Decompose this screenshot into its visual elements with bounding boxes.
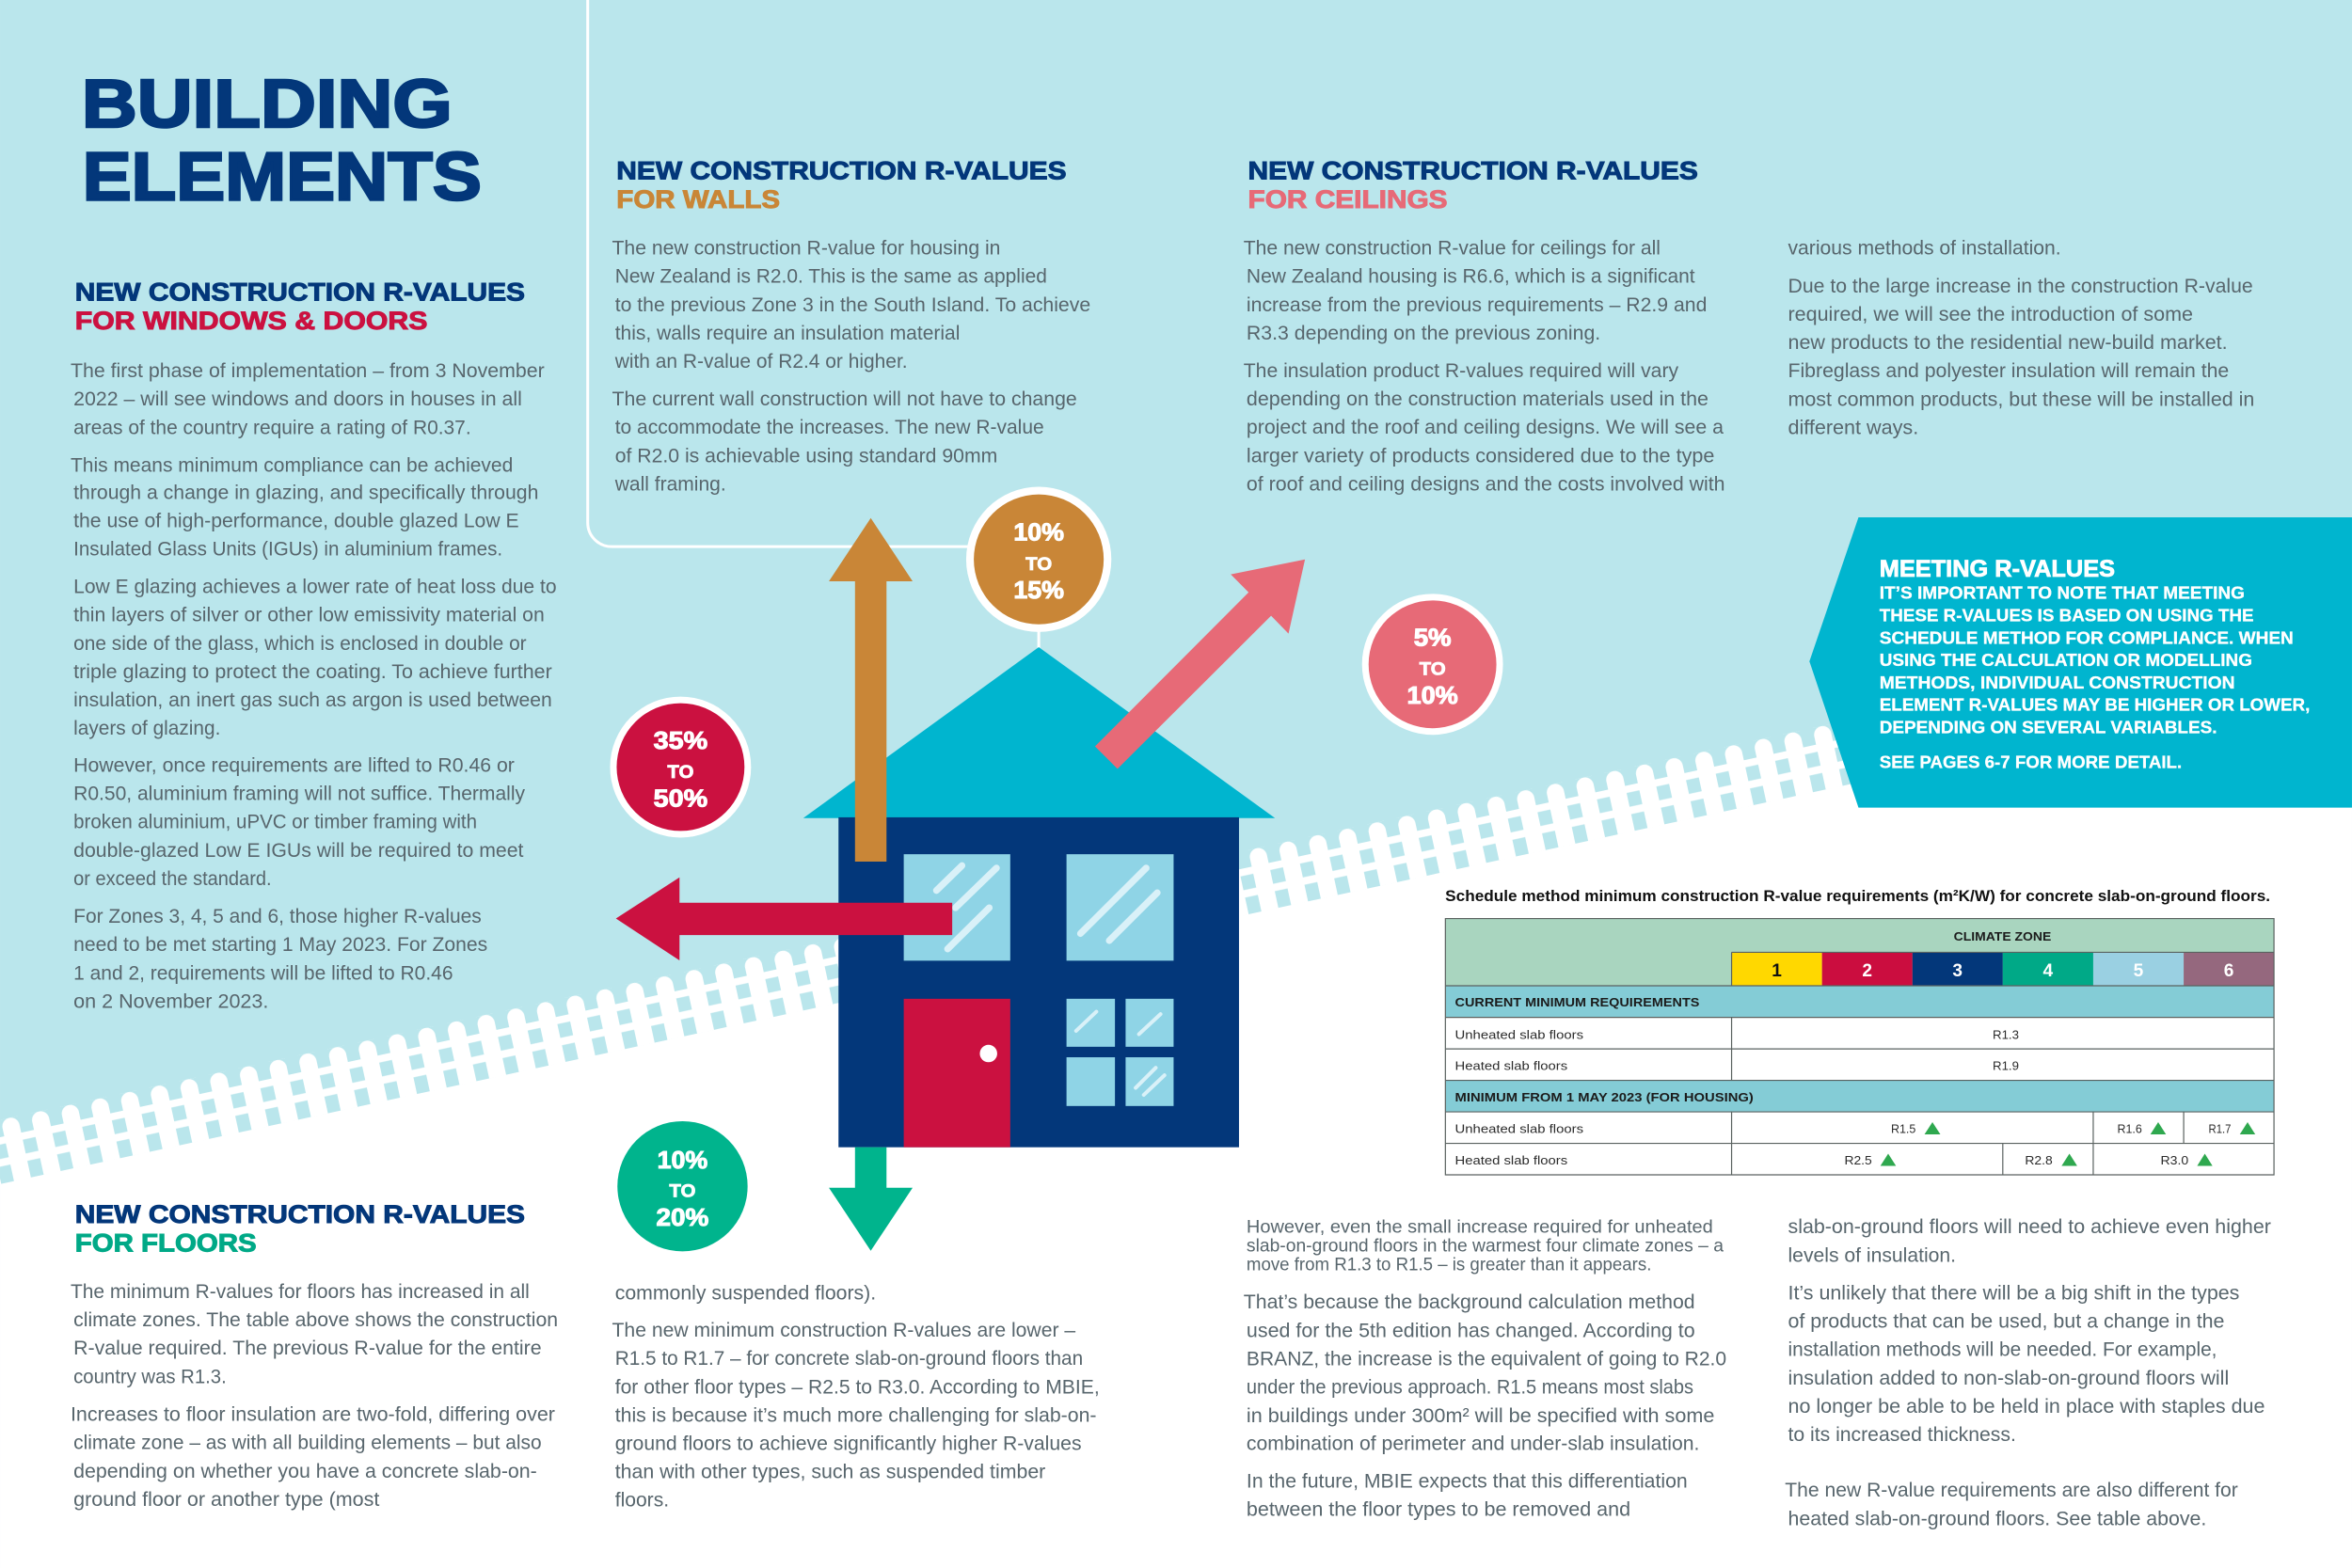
window: small four pane <box>1067 999 1173 1106</box>
badge: windows 35% to 50%: TO <box>667 762 693 783</box>
heading: windows and doors: NEW CONSTRUCTION R-VALUES <box>75 278 525 307</box>
body text: ceilings column one: increase from the previous requirements – R2.9 and <box>1247 294 1707 316</box>
section band: minimum from 1 May 2023 <box>1445 1081 2274 1112</box>
heading: ceilings <box>1248 157 1698 214</box>
callout: meeting R-values: IT’S IMPORTANT TO NOTE THAT MEETING <box>1880 584 2245 603</box>
table rows: new values: Unheated slab floors <box>1455 1122 1583 1136</box>
section band: current minimum requirements <box>1445 986 2274 1018</box>
body text: windows and doors: This means minimum compliance can be achieved <box>71 454 513 476</box>
body text: floors column one: Increases to floor insulation are two-fold, differing over <box>71 1403 555 1425</box>
badge: windows 35% to 50%: 50% <box>654 784 707 812</box>
body text: floors column three: BRANZ, the increase is the equivalent of going to R2.0 <box>1247 1349 1726 1370</box>
house body <box>838 817 1239 1148</box>
badge: floors 10% to 20%: 10% <box>658 1146 707 1174</box>
table rows: new values: R1.7 <box>2209 1122 2231 1136</box>
body text: floors column one: The minimum R-values for floors has increased in all <box>71 1281 530 1303</box>
arrow: floor heat loss <box>829 1148 913 1251</box>
body text: ceilings column two: most common products, but these will be installed in <box>1788 388 2254 410</box>
body text: floors column two: ground floors to achieve significantly higher R-values <box>615 1433 1082 1455</box>
body text: walls: this, walls require an insulation material <box>615 323 960 344</box>
heading: windows and doors: FOR WINDOWS & DOORS <box>75 307 427 335</box>
body text: windows and doors: thin layers of silver or other low emissivity material on <box>73 605 545 626</box>
heading: walls: FOR WALLS <box>616 185 780 214</box>
body text: walls: The current wall construction will not have to change <box>612 388 1077 410</box>
body text: walls: with an R-value of R2.4 or higher. <box>614 351 908 372</box>
title <box>82 66 482 215</box>
table rows: new values: R3.0 <box>2161 1153 2188 1167</box>
body text: floors column one <box>71 1281 558 1511</box>
body text: floors column four: to its increased thickness. <box>1788 1424 2016 1446</box>
badge: ceilings 5% to 10%: 10% <box>1407 681 1458 709</box>
badge: ceilings 5% to 10% <box>1362 594 1503 735</box>
body text: ceilings column two: Fibreglass and polyester insulation will remain the <box>1788 360 2229 382</box>
heading: ceilings: FOR CEILINGS <box>1248 185 1448 214</box>
body text: floors column three: slab-on-ground floors in the warmest four climate zones – a <box>1247 1236 1724 1257</box>
body text: floors column four: of products that can be used, but a change in the <box>1788 1310 2224 1332</box>
body text: windows and doors: 1 and 2, requirements will be lifted to R0.46 <box>73 962 453 984</box>
body text: floors column two: The new minimum construction R-values are lower – <box>612 1320 1075 1341</box>
body text: floors column three: used for the 5th edition has changed. According to <box>1247 1320 1695 1341</box>
body text: walls: to the previous Zone 3 in the South Island. To achieve <box>615 294 1090 316</box>
body text: floors column three: move from R1.3 to R1.5 – is greater than it appears. <box>1247 1255 1651 1275</box>
body text: windows and doors: one side of the glass, which is enclosed in double or <box>73 633 527 655</box>
window: upper right <box>1067 854 1173 960</box>
body text: windows and doors: R0.50, aluminium framing will not suffice. Thermally <box>73 784 526 805</box>
climate zone colour swatches: 1 <box>1772 961 1782 981</box>
badge: floors 10% to 20%: 20% <box>657 1203 708 1231</box>
badge: floors 10% to 20%: TO <box>669 1180 695 1201</box>
heading: walls <box>616 157 1067 214</box>
body text: ceilings column two <box>1788 238 2254 438</box>
body text: ceilings column one: depending on the construction materials used in the <box>1247 388 1708 410</box>
table: schedule method R-value requirements <box>1445 887 2274 1175</box>
body text: windows and doors: Low E glazing achieves a lower rate of heat loss due to <box>73 576 557 597</box>
table rows: new values: R1.5 <box>1891 1122 1915 1136</box>
body text: windows and doors: The first phase of implementation – from 3 November <box>71 360 545 382</box>
body text: floors column three: combination of perimeter and under-slab insulation. <box>1247 1433 1699 1455</box>
section band: current minimum requirements: CURRENT MINIMUM REQUIREMENTS <box>1455 995 1699 1009</box>
body text: floors column four: levels of insulation. <box>1788 1244 1956 1266</box>
body text: floors column one: depending on whether you have a concrete slab-on- <box>73 1461 537 1482</box>
body text: floors column three: However, even the small increase required for unheated <box>1247 1217 1713 1238</box>
badge: walls 10% to 15%: TO <box>1025 554 1052 575</box>
body text: floors column two: than with other types, such as suspended timber <box>615 1462 1045 1483</box>
body text: floors column four: heated slab-on-ground floors. See table above. <box>1788 1508 2206 1529</box>
body text: ceilings column one: project and the roof and ceiling designs. We will see a <box>1247 417 1724 438</box>
body text: ceilings column one: The new construction R-value for ceilings for all <box>1244 238 1661 260</box>
climate zone colour swatches: 6 <box>2224 961 2233 981</box>
body text: floors column three: under the previous approach. R1.5 means most slabs <box>1247 1377 1693 1399</box>
body text: floors column two <box>612 1282 1100 1512</box>
body text: floors column three: between the floor types to be removed and <box>1247 1499 1630 1521</box>
picket fence <box>0 724 1846 1184</box>
badge: walls 10% to 15%: 15% <box>1013 576 1064 604</box>
table rows: new values: R2.8 <box>2025 1153 2053 1167</box>
body text: floors column two: for other floor types – R2.5 to R3.0. According to MBIE, <box>615 1376 1100 1398</box>
body text: floors column four <box>1785 1216 2271 1529</box>
body text: walls: New Zealand is R2.0. This is the same as applied <box>615 266 1047 288</box>
body text: floors column three: In the future, MBIE expects that this differentiation <box>1247 1471 1688 1493</box>
heading: floors <box>75 1200 525 1257</box>
body text: ceilings column one: R3.3 depending on the previous zoning. <box>1247 323 1600 344</box>
badge: ceilings 5% to 10%: TO <box>1420 658 1446 679</box>
house roof <box>803 647 1275 818</box>
table rows: new values: R1.6 <box>2117 1122 2142 1136</box>
table rows: current values: Heated slab floors <box>1455 1059 1568 1073</box>
callout: meeting R-values: ELEMENT R-VALUES MAY BE HIGHER OR LOWER, <box>1880 696 2310 715</box>
white connector line around walls panel <box>588 0 1039 648</box>
body text: windows and doors: areas of the country require a rating of R0.37. <box>73 417 471 438</box>
body text: floors column four: slab-on-ground floors will need to achieve even higher <box>1788 1216 2271 1238</box>
table grid lines <box>1445 919 2274 1175</box>
body text: windows and doors: layers of glazing. <box>73 718 220 739</box>
body text: ceilings column one: The insulation product R-values required will vary <box>1244 360 1679 382</box>
callout: meeting R-values: DEPENDING ON SEVERAL VARIABLES. <box>1880 718 2217 736</box>
climate zone colour swatches: 2 <box>1862 961 1872 981</box>
table rows: current values: Unheated slab floors <box>1455 1027 1583 1041</box>
body text: floors column three: in buildings under 300m² will be specified with some <box>1247 1405 1714 1427</box>
body text: windows and doors: For Zones 3, 4, 5 and 6, those higher R-values <box>73 906 482 927</box>
body text: floors column two: this is because it’s much more challenging for slab-on- <box>615 1404 1096 1426</box>
badge: walls 10% to 15% <box>966 487 1111 632</box>
body text: floors column one: R-value required. The previous R-value for the entire <box>73 1338 542 1359</box>
badge: windows 35% to 50%: 35% <box>654 726 707 754</box>
body text: ceilings column one: New Zealand housing is R6.6, which is a significant <box>1247 266 1695 288</box>
body text: windows and doors: triple glazing to protect the coating. To achieve further <box>73 661 552 683</box>
body text: floors column one: climate zone – as with all building elements – but also <box>73 1432 542 1453</box>
body text: ceilings column one <box>1244 238 1725 495</box>
heading: floors: NEW CONSTRUCTION R-VALUES <box>75 1200 525 1228</box>
callout: meeting R-values: MEETING R-VALUES <box>1880 557 2115 582</box>
body text: ceilings column two: required, we will see the introduction of some <box>1788 304 2193 325</box>
body text: floors column two: R1.5 to R1.7 – for concrete slab-on-ground floors than <box>615 1348 1083 1370</box>
table header: CLIMATE ZONE <box>1954 929 2051 943</box>
climate zone colour swatches <box>1732 952 2274 986</box>
body text: windows and doors: broken aluminium, uPVC or timber framing with <box>73 812 477 833</box>
body text: ceilings column two: different ways. <box>1788 417 1918 438</box>
climate zone colour swatches: 3 <box>1952 961 1963 981</box>
body text: floors column four: The new R-value requirements are also different for <box>1785 1480 2238 1501</box>
white ground <box>0 675 2352 1568</box>
heading: walls: NEW CONSTRUCTION R-VALUES <box>616 157 1067 185</box>
table rows: current values <box>1445 1018 2274 1081</box>
body text: windows and doors: through a change in glazing, and specifically through <box>73 482 538 503</box>
body text: floors column two: commonly suspended floors). <box>615 1282 876 1304</box>
body text: ceilings column one: of roof and ceiling designs and the costs involved with <box>1247 473 1725 495</box>
body text: walls <box>612 238 1090 495</box>
body text: windows and doors: Insulated Glass Units (IGUs) in aluminium frames. <box>73 539 502 561</box>
body text: windows and doors: 2022 – will see windows and doors in houses in all <box>73 388 522 410</box>
callout: meeting R-values: SCHEDULE METHOD FOR COMPLIANCE. WHEN <box>1880 628 2294 647</box>
heading: windows and doors <box>75 278 525 335</box>
arrow: windows heat loss <box>616 878 952 960</box>
body text: ceilings column two: new products to the residential new-build market. <box>1788 332 2228 354</box>
body text: walls: The new construction R-value for housing in <box>612 238 1000 260</box>
climate zone colour swatches: 5 <box>2134 961 2144 981</box>
climate zone colour swatches: 4 <box>2042 961 2053 981</box>
body text: windows and doors <box>71 360 557 1012</box>
body text: walls: wall framing. <box>614 473 726 495</box>
body text: floors column three <box>1244 1217 1726 1521</box>
table rows: current values: R1.3 <box>1993 1027 2019 1041</box>
badge: windows 35% to 50% <box>610 697 751 837</box>
callout: meeting R-values: USING THE CALCULATION OR MODELLING <box>1880 651 2252 670</box>
body text: ceilings column one: larger variety of products considered due to the type <box>1247 445 1714 467</box>
table header <box>1445 919 2274 986</box>
callout: meeting R-values: METHODS, INDIVIDUAL CONSTRUCTION <box>1880 673 2235 692</box>
body text: windows and doors: on 2 November 2023. <box>73 990 268 1012</box>
body text: windows and doors: insulation, an inert gas such as argon is used between <box>73 689 552 711</box>
title: BUILDING <box>82 66 453 142</box>
body text: floors column one: country was R1.3. <box>73 1366 227 1387</box>
heading: ceilings: NEW CONSTRUCTION R-VALUES <box>1248 157 1698 185</box>
body text: floors column one: climate zones. The table above shows the construction <box>73 1309 558 1331</box>
arrow: ceiling heat loss <box>1095 560 1305 768</box>
panel: floors <box>71 1200 2271 1529</box>
body text: floors column one: ground floor or another type (most <box>73 1489 380 1511</box>
section band: minimum from 1 May 2023: MINIMUM FROM 1 MAY 2023 (FOR HOUSING) <box>1455 1090 1754 1104</box>
table title: Schedule method minimum construction R-value requirements (m²K/W) for concrete slab-on-ground floors. <box>1445 887 2270 905</box>
badge: walls 10% to 15%: 10% <box>1013 518 1064 546</box>
body text: floors column four: insulation added to non-slab-on-ground floors will <box>1788 1368 2229 1389</box>
body text: windows and doors: the use of high-performance, double glazed Low E <box>73 510 519 531</box>
badge: floors 10% to 20% <box>617 1121 748 1251</box>
table rows: new values: Heated slab floors <box>1455 1153 1568 1167</box>
panel: ceilings <box>1244 157 2254 495</box>
panel: windows and doors <box>71 278 557 1012</box>
badge: ceilings 5% to 10%: 5% <box>1414 623 1452 651</box>
table rows: new values: R2.5 <box>1844 1153 1872 1167</box>
body text: ceilings column two: various methods of installation. <box>1788 238 2061 260</box>
body text: windows and doors: However, once requirements are lifted to R0.46 or <box>73 754 515 776</box>
front door <box>904 999 1010 1148</box>
body text: windows and doors: need to be met starting 1 May 2023. For Zones <box>73 934 487 956</box>
window: upper left <box>904 854 1010 960</box>
body text: floors column two: floors. <box>615 1490 669 1512</box>
callout: meeting R-values: THESE R-VALUES IS BASED ON USING THE <box>1880 607 2254 626</box>
panel: walls <box>612 157 1090 495</box>
heading: floors: FOR FLOORS <box>75 1228 257 1257</box>
body text: walls: to accommodate the increases. The new R-value <box>615 417 1044 438</box>
table rows: current values: R1.9 <box>1993 1059 2019 1073</box>
title: ELEMENTS <box>83 139 482 215</box>
body text: walls: of R2.0 is achievable using standard 90mm <box>615 445 997 467</box>
house illustration <box>803 647 1275 1148</box>
body text: windows and doors: or exceed the standard. <box>73 868 272 890</box>
table rows: new values <box>1445 1112 2274 1175</box>
body text: floors column four: no longer be able to be held in place with staples due <box>1788 1396 2265 1418</box>
body text: ceilings column two: Due to the large increase in the construction R-value <box>1788 276 2253 297</box>
body text: floors column three: That’s because the background calculation method <box>1244 1291 1695 1313</box>
body text: windows and doors: double-glazed Low E IGUs will be required to meet <box>73 840 524 862</box>
body text: floors column four: installation methods will be needed. For example, <box>1788 1339 2217 1361</box>
callout: meeting R-values <box>1809 517 2352 808</box>
arrow: walls heat loss <box>829 518 913 862</box>
body text: floors column four: It’s unlikely that there will be a big shift in the types <box>1788 1282 2239 1304</box>
callout: meeting R-values: SEE PAGES 6-7 FOR MORE DETAIL. <box>1880 752 2182 771</box>
